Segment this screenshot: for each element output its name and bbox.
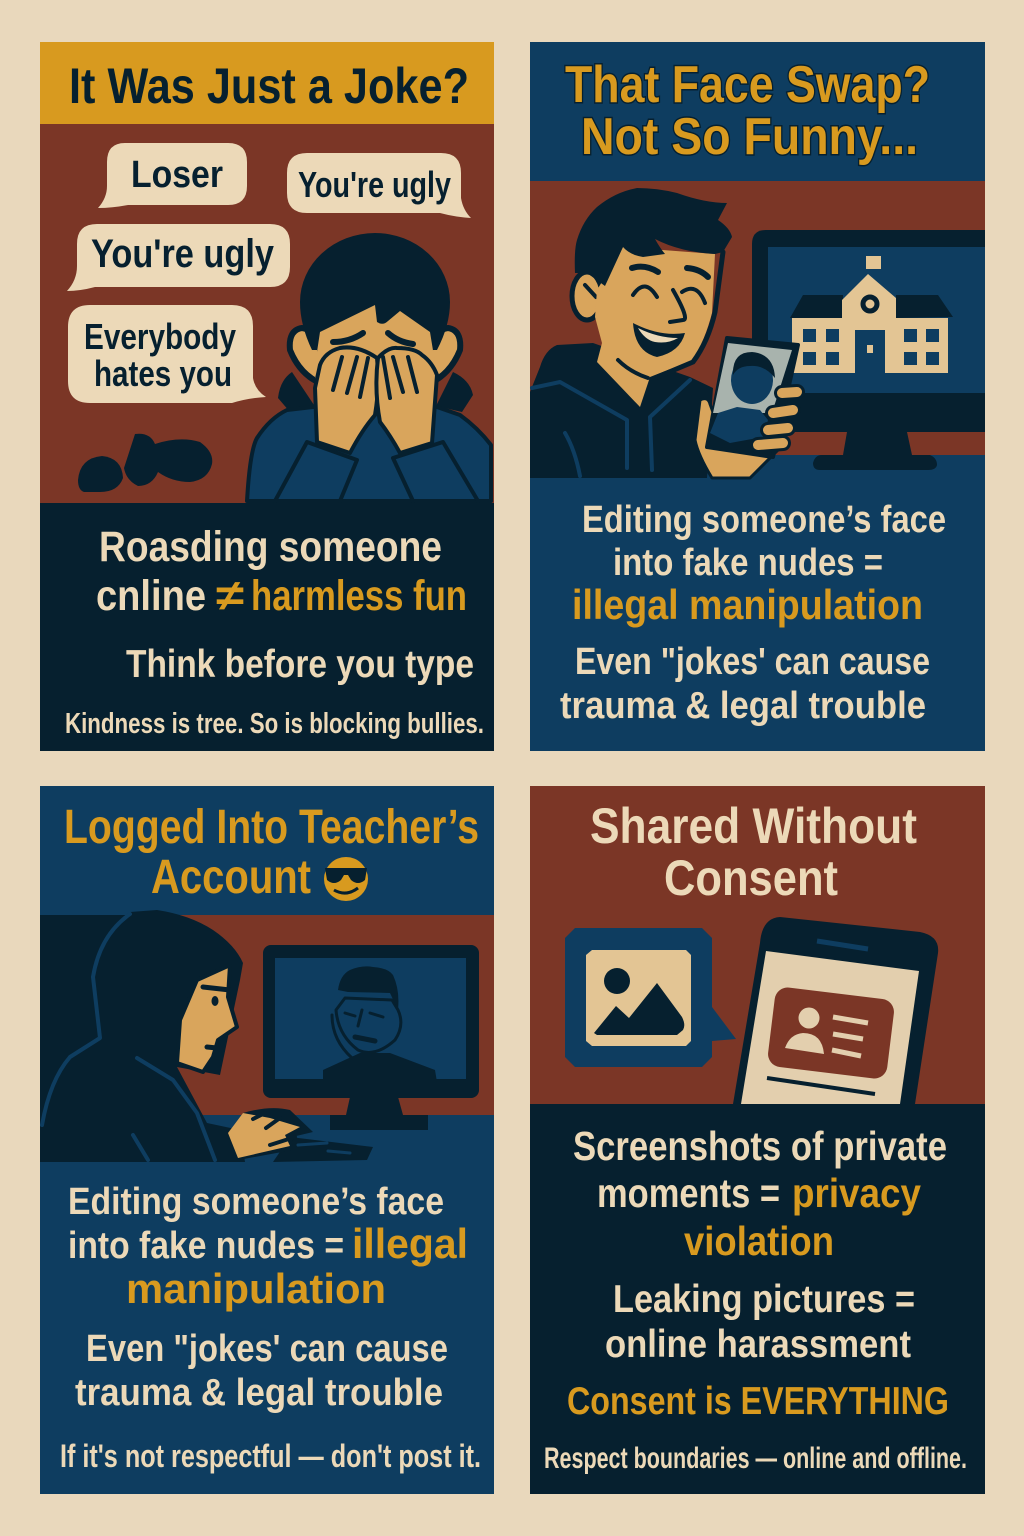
speech bubble: You're ugly: You're ugly (91, 232, 275, 276)
heading: Shared Without Consent (590, 798, 917, 906)
heading: Shared Without Consent: Consent (664, 850, 838, 906)
text: If it's not respectful: If it's not respectful — don't post it. (60, 1438, 481, 1474)
panel: That Face Swap (530, 42, 985, 751)
text: Even jokes can cause trauma (560, 641, 930, 727)
panel: Shared Without Consent (530, 786, 985, 1494)
heading bar: It Was Just a Joke: It Was Just a Joke? (69, 58, 469, 114)
text: Kindness is tree: Kindness is tree. So is blocking bullies. (65, 708, 484, 740)
text: Roasding someone online: Roasding someone (99, 523, 442, 571)
text: Editing someone's face: illegal manipulation (572, 581, 923, 628)
text: Editing someone's face: Editing someone’s face (68, 1181, 444, 1223)
heading: That Face Swap: Not So Funny... (581, 108, 918, 166)
illustration: monitor showing school (752, 230, 985, 470)
text: Editing someone's face: into fake nudes = (613, 542, 883, 584)
text: Leaking pictures: online harassment (605, 1323, 911, 1366)
speech bubble: Loser (98, 143, 247, 208)
heading: Shared Without Consent: Shared Without (590, 798, 917, 854)
illustration: monitor with teacher on screen (263, 945, 479, 1130)
speech bubble: You're ugly top (287, 153, 471, 218)
illustration: laughing boy holding phone (530, 188, 798, 478)
heading: That Face Swap (565, 56, 930, 166)
text: Roasding someone online: harmless fun (251, 572, 467, 620)
speech bubble: Everybody hates you: Everybody (84, 316, 236, 357)
text: Screenshots of private moments: Screenshots of private (573, 1123, 947, 1169)
text: Even jokes can cause trauma: Even "jokes' can cause (575, 641, 930, 683)
text: Editing someone's face: into fake nudes = (68, 1225, 344, 1267)
text: Editing someone's face: Editing someone’s face (582, 499, 946, 541)
heading: Logged Into Teacher's Account (64, 801, 479, 904)
text: Screenshots of private moments: privacy (792, 1170, 921, 1216)
heading bar: It Was Just a Joke (40, 42, 494, 124)
icon: image chat bubble (565, 928, 736, 1067)
text: Even jokes can cause trauma: trauma & legal trouble (75, 1372, 443, 1414)
panel: Logged Into Teacher's Account (40, 786, 494, 1494)
text: Think before you type: Think before you type (126, 643, 474, 686)
text: Even jokes can cause trauma (75, 1328, 448, 1414)
text: Consent is EVERYTHING: Consent is EVERYTHING (567, 1380, 949, 1423)
heading: Logged Into Teacher's Account: Logged Into Teacher’s (64, 801, 479, 854)
text: Editing someone's face: illegal (352, 1220, 468, 1267)
speech bubble: You're ugly (67, 224, 290, 291)
panel: It Was Just a Joke (40, 42, 494, 751)
text: Leaking pictures: Leaking pictures = (613, 1278, 915, 1321)
text: Roasding someone online: cnline (96, 572, 206, 620)
text: Editing someone's face (68, 1181, 468, 1312)
text: Even jokes can cause trauma: trauma & legal trouble (560, 685, 926, 727)
text: Screenshots of private moments: moments = (597, 1170, 780, 1216)
heading: That Face Swap: That Face Swap? (565, 56, 930, 114)
text: Screenshots of private moments (573, 1123, 947, 1264)
icon: sunglasses emoji (324, 857, 368, 901)
text: Roasding someone online (96, 523, 467, 620)
icon: phone with profile card (733, 917, 938, 1104)
illustration: crying person covering face (247, 233, 491, 501)
heading: Logged Into Teacher's Account: Account (151, 851, 311, 904)
illustration: hooded hacker at keyboard (40, 910, 373, 1162)
speech bubble: Everybody hates you (68, 305, 266, 403)
text: Even jokes can cause trauma: Even "jokes' can cause (86, 1328, 448, 1370)
text: Screenshots of private moments: violation (684, 1218, 834, 1264)
text: Editing someone's face: manipulation (126, 1265, 386, 1312)
icon: dark silhouettes on floor (78, 434, 212, 492)
speech bubble: Everybody hates you: hates you (94, 353, 232, 394)
text: Roasding someone online: ≠ (216, 572, 244, 620)
text: Leaking pictures (605, 1278, 915, 1366)
speech bubble: Loser: Loser (131, 154, 223, 196)
speech bubble: You're ugly top: You're ugly (298, 164, 451, 205)
text: Editing someone's face (572, 499, 946, 628)
